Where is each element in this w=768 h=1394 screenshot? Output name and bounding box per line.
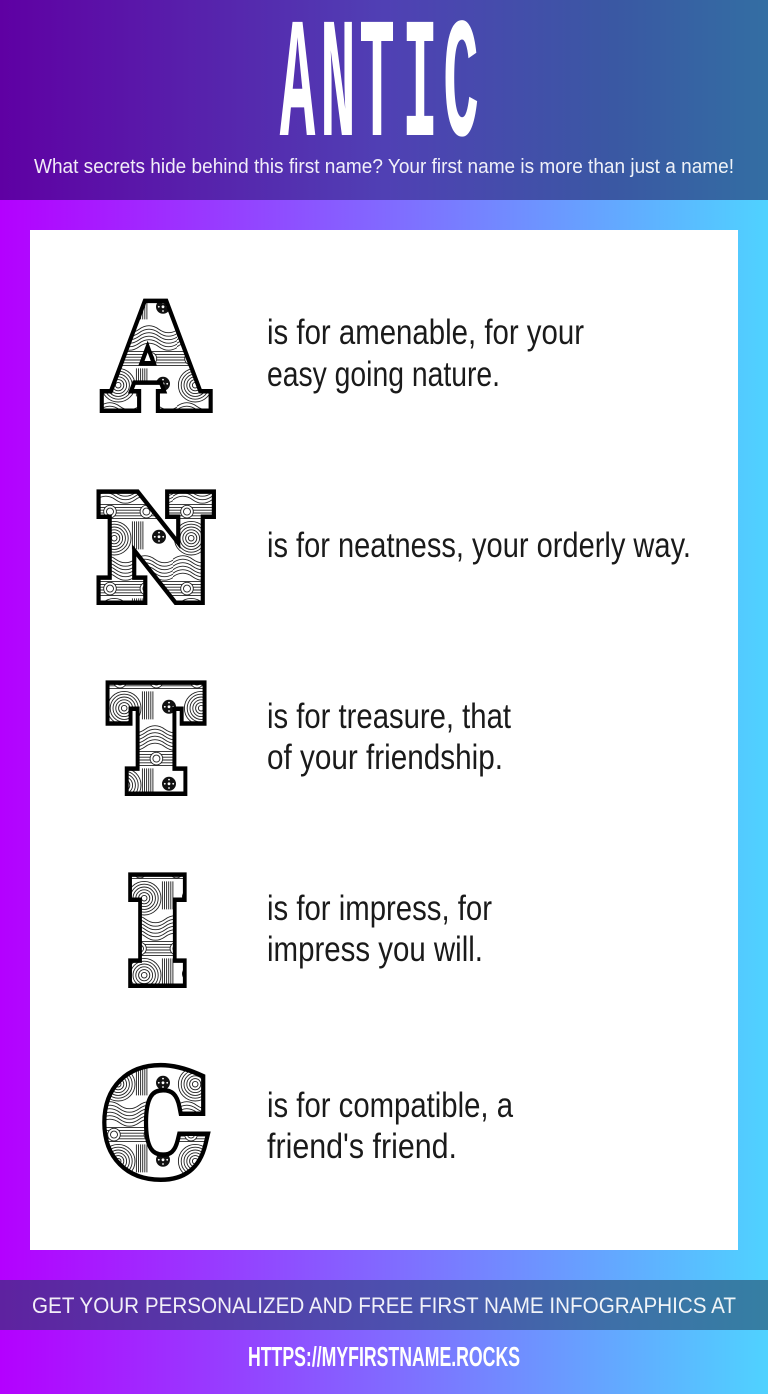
text: N meaning: is for neatness, your orderly way. <box>267 526 691 565</box>
text: A meaning <box>267 313 584 394</box>
row I <box>132 858 492 1008</box>
icon: patterned letter T: T <box>114 666 198 816</box>
icon: patterned letter T: T <box>114 666 198 816</box>
footer text: GET YOUR PERSONALIZED AND FREE FIRST NAME INFOGRAPHICS AT <box>32 1293 736 1318</box>
footer call to action band <box>0 1280 768 1330</box>
icon: patterned letter I: I <box>132 858 182 1008</box>
icon: patterned letter C: C <box>108 1050 204 1200</box>
text: A meaning: easy going nature. <box>267 355 500 394</box>
row A <box>106 278 584 437</box>
text: I meaning: is for impress, for <box>267 889 492 928</box>
icon: patterned letter N: N <box>102 475 210 625</box>
header band <box>0 0 768 200</box>
text: C meaning: friend's friend. <box>267 1127 457 1166</box>
footer url: HTTPS://MYFIRSTNAME.ROCKS <box>248 1341 520 1372</box>
subtitle: What secrets hide behind this first name? Your first name is more than just a name! <box>34 156 734 178</box>
text: I meaning <box>267 889 492 969</box>
text: T meaning <box>267 697 511 777</box>
panel: letters <box>30 230 738 1250</box>
text: A meaning: is for amenable, for your <box>267 313 584 352</box>
text: C meaning: is for compatible, a <box>267 1086 513 1125</box>
title <box>280 0 479 187</box>
text: T meaning: of your friendship. <box>267 738 503 777</box>
icon: patterned letter A: A <box>106 278 206 437</box>
row T <box>114 666 511 816</box>
row C <box>108 1050 513 1200</box>
icon: patterned letter A: A <box>106 278 206 437</box>
text: T meaning: is for treasure, that <box>267 697 511 736</box>
icon: patterned letter N: N <box>102 475 210 625</box>
icon: patterned letter I: I <box>132 858 182 1008</box>
text: I meaning: impress you will. <box>267 930 483 969</box>
text: C meaning <box>267 1086 513 1166</box>
icon: patterned letter C: C <box>108 1050 204 1200</box>
row N <box>102 475 691 625</box>
